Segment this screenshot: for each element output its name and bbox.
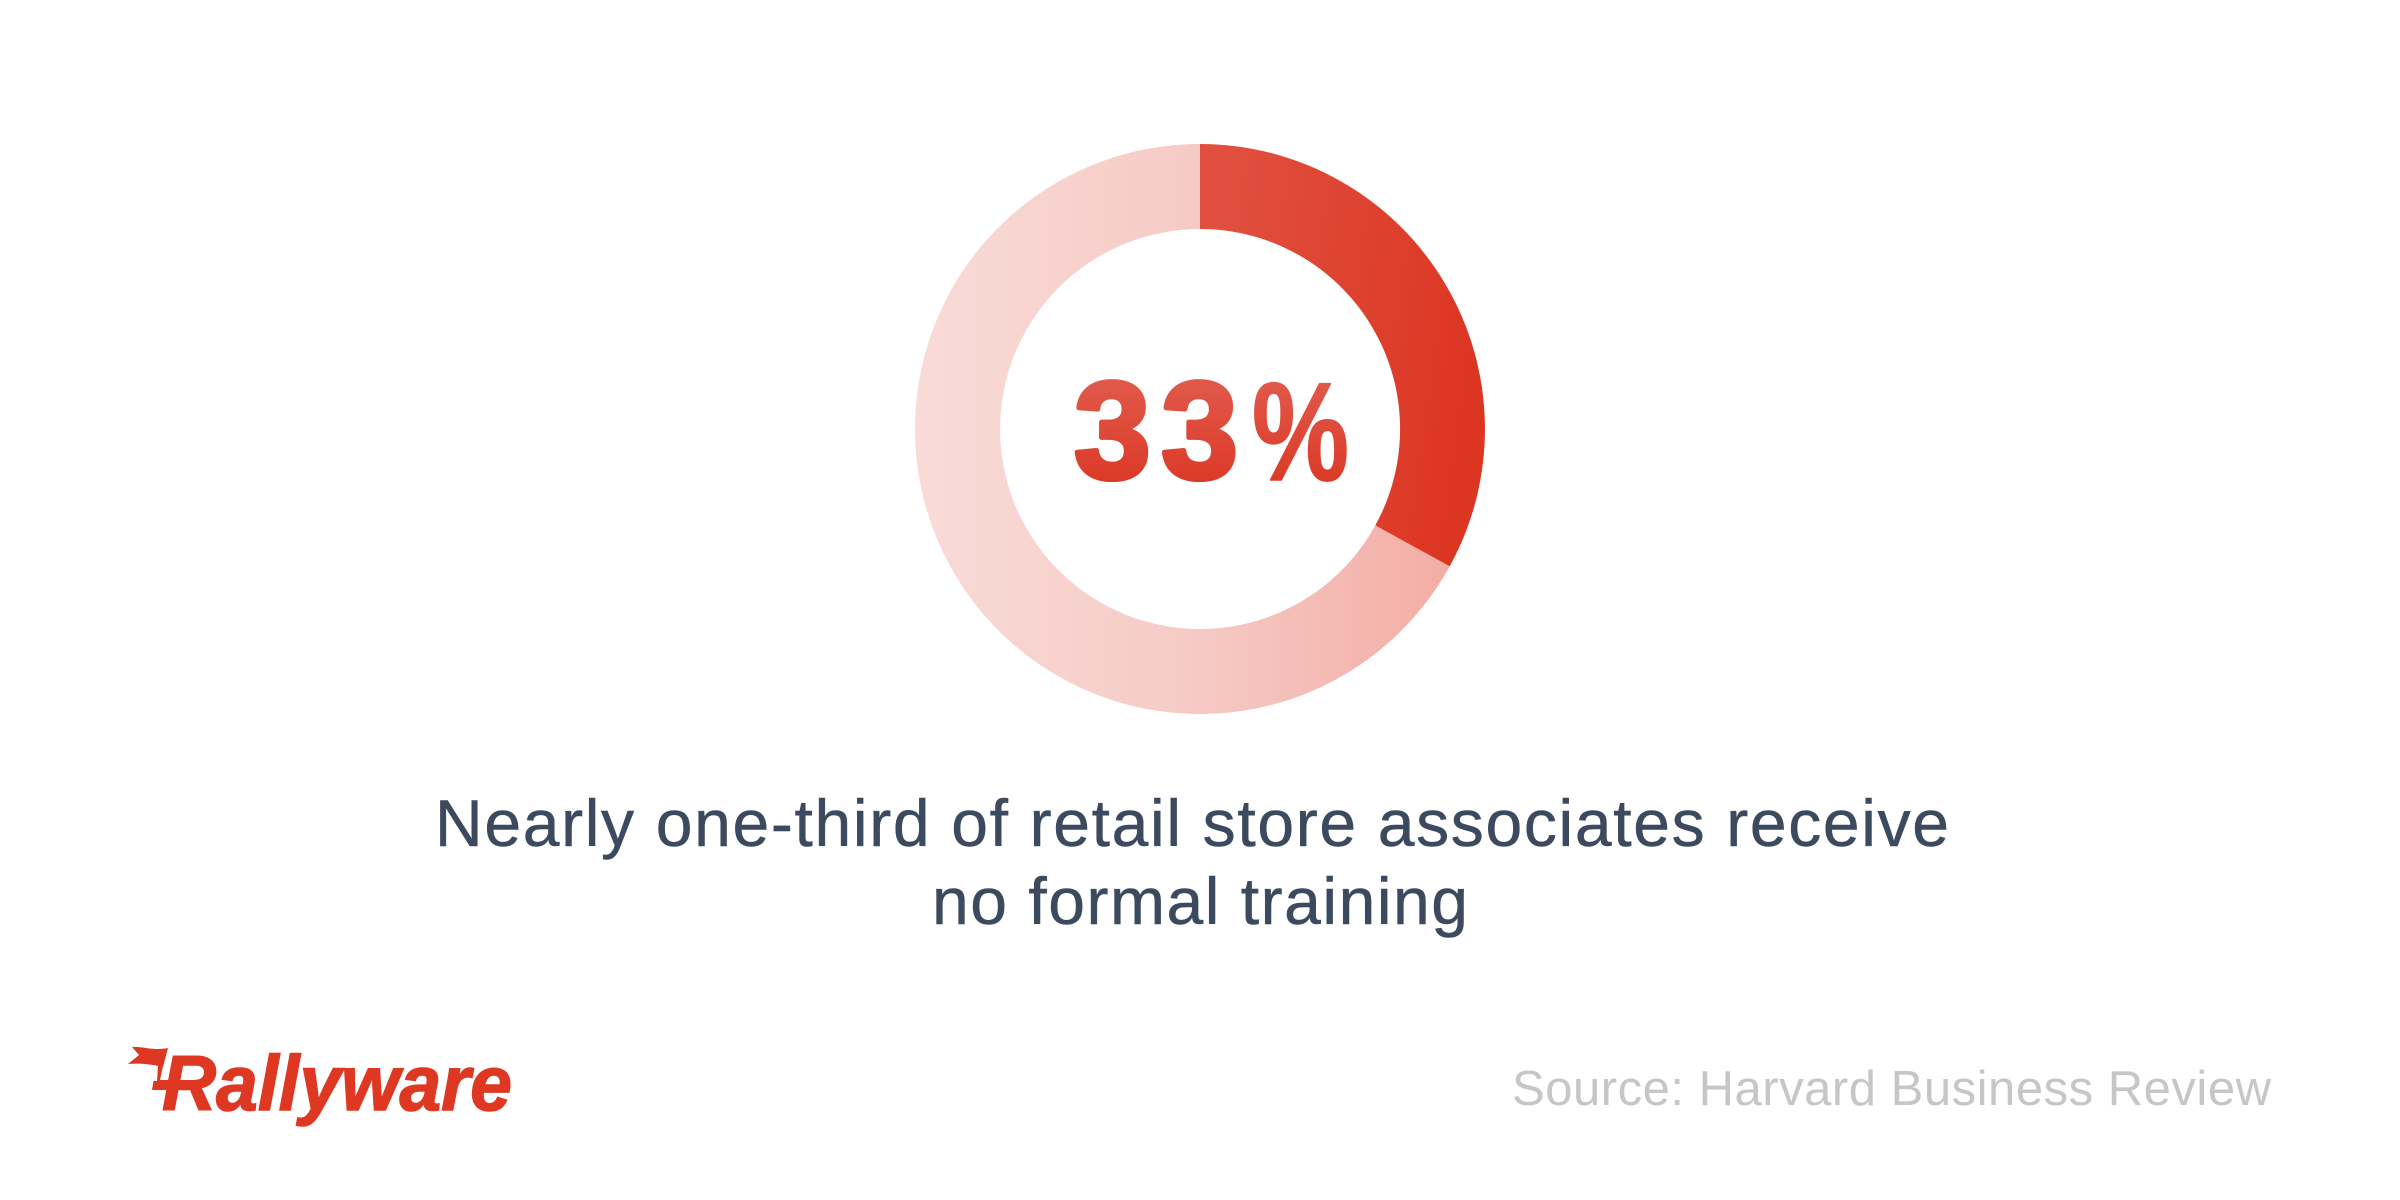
icon: flag	[128, 1047, 168, 1067]
logo wordmark: Rallyware	[162, 1039, 512, 1127]
percent sign: %	[1252, 353, 1349, 510]
donut chart: 33 percent	[915, 144, 1485, 714]
description text: Nearly one-third of retail store associates receive	[435, 786, 1949, 860]
big percentage	[1074, 353, 1349, 510]
source: Source: Harvard Business Review	[1512, 1062, 2272, 1116]
logo flagpole and bar	[152, 1066, 180, 1090]
Rallyware logo	[128, 1039, 512, 1127]
donut remainder segment	[915, 144, 1450, 714]
description text: no formal training	[932, 864, 1468, 938]
digits 33: 33	[1074, 354, 1238, 508]
donut 33 percent segment	[1200, 144, 1485, 566]
description text	[435, 786, 1949, 938]
